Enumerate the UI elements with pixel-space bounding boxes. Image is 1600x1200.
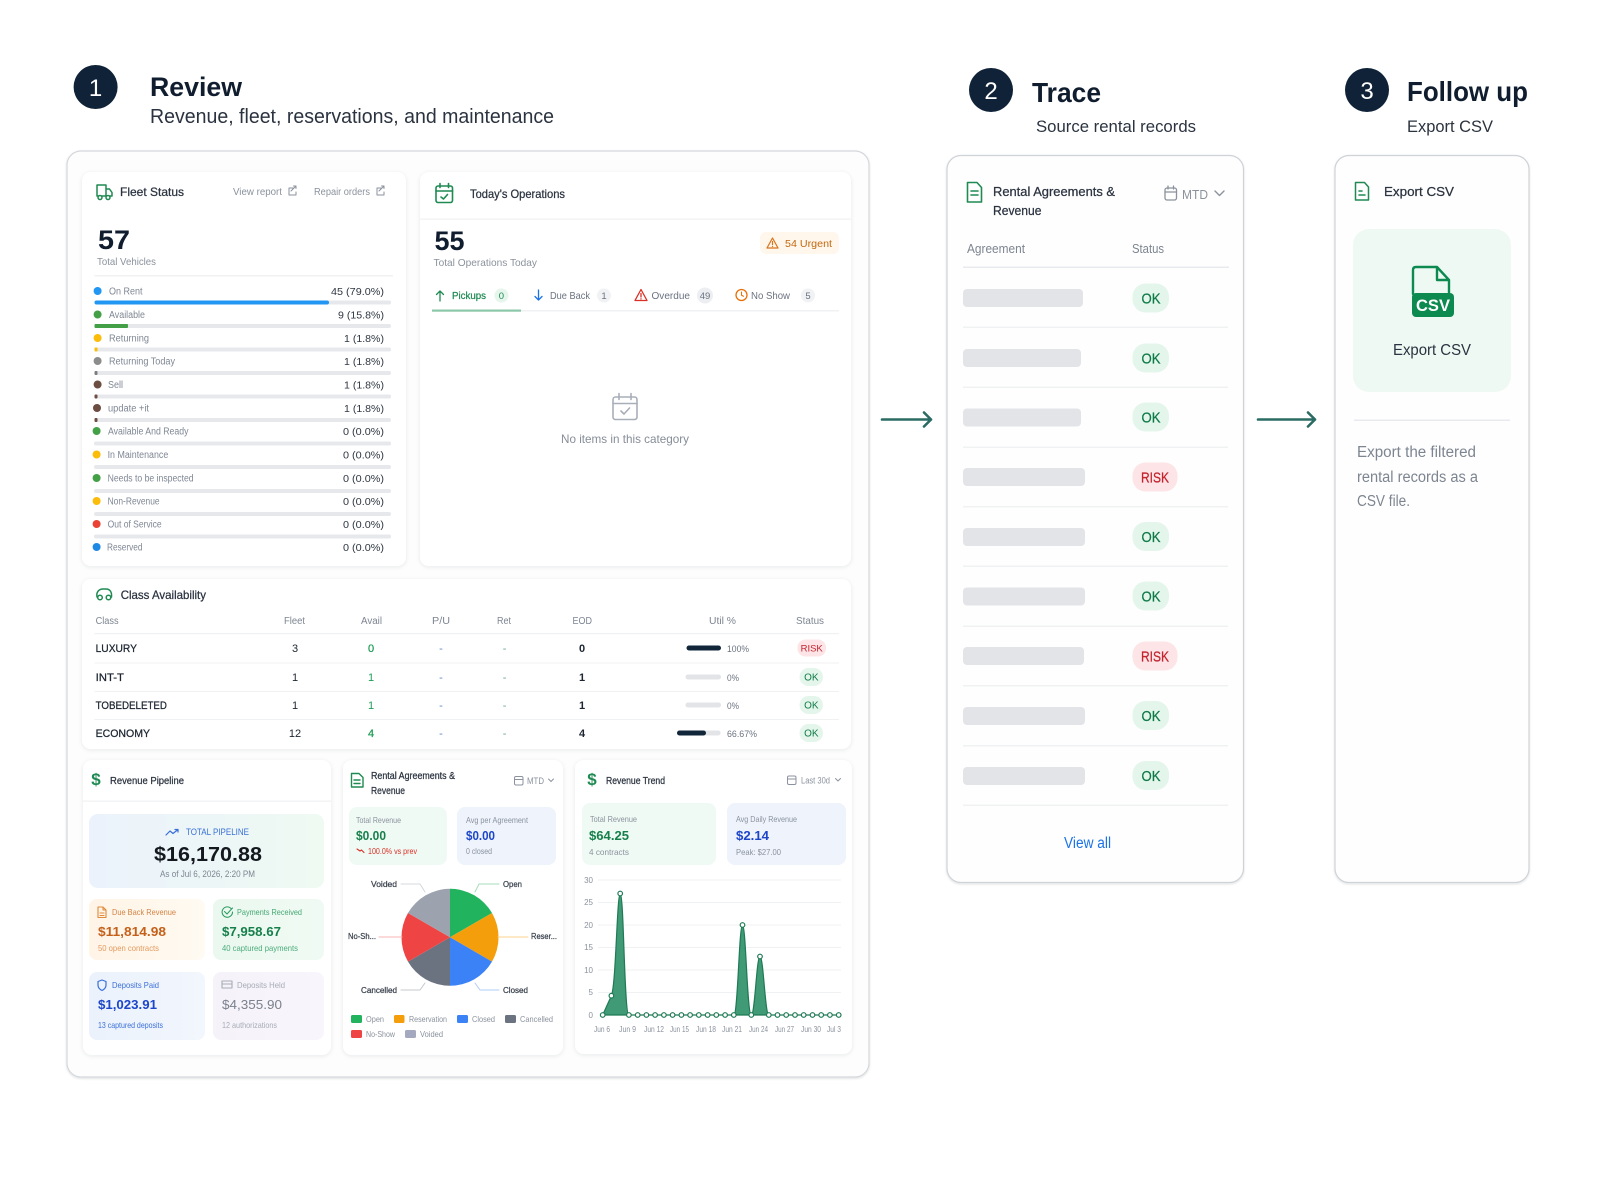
panel: rental agreements and revenue (small) [343,760,563,1055]
status row: Reserved [93,542,384,554]
table row: TOBEDELETED: - [439,700,443,712]
table row: INT-T: INT-T [96,672,124,684]
pie chart: Voided [371,879,397,889]
card: export csv action [1353,229,1511,392]
step 1 heading: Review [74,65,554,128]
status row: Returning: Returning [109,334,149,344]
control: MTD selector [514,776,554,787]
tab: no show [736,288,815,302]
table row: TOBEDELETED: OK [804,700,819,712]
card: average per agreement: 0 closed [466,846,492,856]
table row: ECONOMY: - [503,728,507,740]
pie chart: Closed [503,985,528,995]
table header: Ret [497,616,511,627]
area chart: revenue trend [584,876,841,1034]
table row: LUXURY: LUXURY [96,643,138,655]
tab: pickups [436,288,508,302]
table row: INT-T: - [503,672,507,684]
panel: today's operations: Today's Operations [470,187,565,201]
panel: export csv: Export CSV [1384,184,1454,199]
empty state [561,394,689,446]
card: total pipeline: As of Jul 6, 2026, 2:20 PM [160,869,255,879]
arrow: trace to follow up [1258,412,1315,426]
pie chart: Cancelled [361,985,397,995]
panel: fleet status: Repair orders [314,187,370,198]
area chart: revenue trend: Jun 12 [644,1025,664,1034]
tab: due back: Due Back [550,290,591,302]
status row: Returning Today [94,356,391,375]
status row: Returning Today: Returning Today [109,356,175,368]
area chart: revenue trend: 5 [589,988,594,997]
status row: Reserved: Reserved [107,542,142,554]
record row 9: OK [1142,768,1160,785]
card: payments received: $7,958.67 [222,924,281,939]
tab: overdue: Overdue [652,290,690,302]
text block: export description: CSV file. [1357,493,1410,510]
table row: LUXURY: 100% [727,644,749,654]
status row: Sell: Sell [108,380,123,391]
table header: EOD [572,616,592,627]
link: view all: View all [1064,835,1111,852]
table row: TOBEDELETED: 0% [727,701,739,711]
table header: Status [1132,242,1164,256]
record row 8: OK [1142,708,1160,725]
table row: TOBEDELETED: 1 [292,700,298,712]
table row: INT-T: OK [804,672,819,684]
panel: revenue pipeline [83,760,331,1055]
table row: INT-T: 0% [727,673,739,683]
icon: document [1356,182,1368,200]
icon: truck [97,185,112,200]
card: due back revenue: 50 open contracts [98,943,159,953]
record row 1: OK [1142,290,1160,308]
card: average per agreement [457,807,556,865]
tab: no show: No Show [751,290,790,302]
record row 5: OK [1142,529,1160,546]
record row 5 [963,522,1169,551]
card: deposits paid [89,972,205,1040]
step 2 heading: Trace: Source rental records [1036,117,1196,136]
status row: Non-Revenue: 0 (0.0%) [343,496,384,508]
status row: Non-Revenue: Non-Revenue [108,496,160,508]
card: total revenue: 100.0% vs prev [368,846,418,856]
panel: today's operations: Total Operations Today [434,257,538,269]
status row: Available [94,310,391,328]
card: average per agreement: Avg per Agreement [466,815,529,825]
panel: class availability [82,579,851,749]
icon: dollar: $ [587,770,597,789]
status row: Out of Service: Out of Service [108,520,162,530]
panel: rental agreements and revenue (small): Revenue [371,786,405,797]
status row: Reserved: 0 (0.0%) [343,542,384,554]
card: deposits paid: 13 captured deposits [98,1020,163,1030]
table row: TOBEDELETED: 1 [579,700,585,712]
card: total pipeline: TOTAL PIPELINE [186,827,249,837]
panel: today's operations [420,172,851,566]
icon: document [352,774,363,787]
panel: fleet status: Fleet Status [120,185,184,199]
table row: ECONOMY: 4 [368,728,374,740]
card: due back revenue: $11,814.98 [98,924,166,939]
status row: Returning [94,333,391,352]
chart legend: Voided [420,1029,443,1039]
table row: ECONOMY: 66.67% [727,729,757,739]
card: average daily revenue: Peak: $27.00 [736,847,781,857]
table row: ECONOMY: 12 [289,728,301,740]
pie chart [348,879,557,995]
icon: csv file: CSV [1416,296,1451,315]
table row: LUXURY [96,640,826,656]
table row: INT-T [96,668,823,686]
card: due back revenue: Due Back Revenue [112,907,176,917]
status row: update +it [93,403,391,422]
table row: INT-T: 1 [292,672,298,684]
status row: In Maintenance: In Maintenance [108,450,169,461]
table row: LUXURY: 3 [292,643,298,655]
panel: export csv [1335,156,1529,882]
status row: Available And Ready: Available And Ready [108,426,188,438]
panel: rental agreements trace: Rental Agreements & [993,184,1115,199]
status row: On Rent: 45 (79.0%) [331,286,384,298]
table row: LUXURY: 0 [579,643,585,655]
card: average daily revenue: $2.14 [736,828,770,843]
area chart: revenue trend: 30 [584,876,594,885]
table header: Agreement [967,242,1025,256]
icon: external link [377,186,384,195]
control: last 30 days selector: Last 30d [801,776,830,786]
badge: urgent [760,232,839,254]
area chart: revenue trend: 15 [584,943,594,952]
table header: Class [96,616,119,627]
icon: empty calendar [613,394,637,420]
tab: pickups: Pickups [452,290,486,302]
step 3 heading: Follow up [1345,68,1528,136]
record row 8 [963,701,1169,730]
tab: pickups: 0 [499,291,504,302]
area chart: revenue trend: Jul 3 [827,1025,841,1034]
table row: INT-T: - [439,672,443,684]
arrow: review to trace [882,412,931,426]
icon: csv file [1412,267,1454,317]
status row: Out of Service [93,519,391,538]
area chart: revenue trend: Jun 24 [749,1025,768,1034]
card: deposits held: $4,355.90 [222,997,282,1012]
record row 3: OK [1142,410,1160,426]
status row: Sell [94,380,391,398]
chart legend: No-Show [366,1029,396,1039]
tab: due back [535,288,611,302]
chart legend: Cancelled [520,1014,553,1024]
table row: TOBEDELETED: - [503,700,507,712]
chart legend [351,1014,553,1039]
table header: P/U [432,616,450,627]
icon: external link [289,186,296,195]
table row: TOBEDELETED [96,696,823,714]
table header: Avail [361,616,382,627]
status row: Needs to be inspected [93,473,391,493]
status row: In Maintenance: 0 (0.0%) [343,450,384,462]
area chart: revenue trend: 0 [589,1011,594,1020]
status row: Needs to be inspected: Needs to be inspected [108,474,194,484]
panel: revenue pipeline: Revenue Pipeline [110,775,184,787]
area chart: revenue trend: Jun 30 [801,1025,821,1034]
icon: document [968,182,982,202]
text block: export description: Export the filtered [1357,444,1476,461]
table row: TOBEDELETED: TOBEDELETED [96,700,167,712]
area chart: revenue trend: 20 [584,921,594,930]
area chart: revenue trend: Jun 9 [619,1025,636,1034]
status row: On Rent: On Rent [109,286,143,298]
chart legend: Reservation [409,1014,447,1024]
card: total revenue [582,803,716,865]
table row: TOBEDELETED: 1 [368,700,374,712]
panel: rental agreements trace [947,156,1244,882]
icon: calendar check [436,184,452,202]
card: total revenue: $64.25 [589,828,629,843]
card: payments received: Payments Received [237,907,302,917]
card: total revenue: Total Revenue [356,815,401,825]
record row 1 [963,284,1169,312]
status row: Out of Service: 0 (0.0%) [343,519,384,531]
icon: car [97,589,112,600]
card: deposits paid: $1,023.91 [98,997,157,1012]
table row: ECONOMY: 4 [579,728,586,740]
table row: LUXURY: RISK [801,644,823,654]
table header [967,242,1164,256]
panel: fleet status: 57 [98,225,130,255]
area chart: revenue trend: Jun 18 [696,1025,716,1034]
table row: LUXURY: - [439,643,443,655]
status row: update +it: 1 (1.8%) [344,403,384,415]
table row: ECONOMY: ECONOMY [96,728,151,740]
icon: dollar: $ [91,770,101,789]
status row: In Maintenance [93,450,391,469]
card: deposits held [213,972,324,1040]
step 2 heading: Trace: Trace [1032,77,1101,108]
record row 4: RISK [1141,470,1169,486]
card: deposits paid: Deposits Paid [112,980,159,990]
status row: update +it: update +it [108,404,149,414]
status row: Available: Available [109,310,145,321]
card: deposits held: Deposits Held [237,980,285,990]
status row: Sell: 1 (1.8%) [344,380,384,392]
empty state: No items in this category [561,432,689,446]
table header: Status [796,616,824,627]
step 3 heading: Follow up: Export CSV [1407,117,1494,136]
tab: overdue [635,288,713,304]
card: average daily revenue: Avg Daily Revenue [736,814,797,824]
pie chart: Reser... [531,931,557,941]
card: average daily revenue [727,803,846,865]
card: total revenue: $0.00 [356,828,386,843]
record row 9 [963,761,1169,790]
step 1 heading: Review: Revenue, fleet, reservations, and maintenance [150,106,554,128]
panel: rental agreements and revenue (small): Rental Agreements & [371,771,455,782]
panel: revenue trend [575,760,852,1054]
record row 2: OK [1142,350,1160,368]
tab: overdue: 49 [700,291,710,302]
step 1 heading: Review: 1 [89,75,102,102]
table header: Fleet [284,616,305,627]
control: MTD selector: MTD [527,776,544,787]
card: payments received [213,899,324,960]
card: total revenue: Total Revenue [590,814,637,824]
table row: ECONOMY: - [439,728,443,740]
pie chart: Open [503,879,522,889]
control: last 30 days selector [788,776,840,786]
pie chart: No-Sh... [348,931,376,941]
panel: fleet status: Total Vehicles [97,256,156,268]
record row 3 [963,402,1169,432]
status row: Needs to be inspected: 0 (0.0%) [343,473,384,485]
record row 7: RISK [1141,648,1169,666]
panel: class availability: Class Availability [121,588,206,602]
tab: no show: 5 [805,291,811,302]
card: total pipeline: $16,170.88 [154,844,262,866]
table row: ECONOMY: OK [804,728,819,740]
status row: Returning Today: 1 (1.8%) [344,356,384,368]
table row: LUXURY: - [503,643,507,655]
status row: Available And Ready: 0 (0.0%) [343,426,384,438]
area chart: revenue trend: Jun 15 [670,1025,689,1034]
step 3 heading: Follow up: Follow up [1407,76,1528,107]
card: total revenue [349,807,447,865]
card: deposits held: 12 authorizations [222,1020,277,1030]
control: MTD selector [1165,186,1224,202]
area chart: revenue trend: 10 [584,966,594,975]
area chart: revenue trend: Jun 27 [775,1025,794,1034]
step 3 heading: Follow up: 3 [1360,78,1374,105]
card: average per agreement: $0.00 [466,828,495,843]
status row: Non-Revenue [93,496,391,516]
area chart: revenue trend: Jun 6 [594,1025,610,1034]
chart legend: Open [366,1014,384,1024]
card: due back revenue [89,899,205,960]
panel: fleet status [82,172,406,566]
text block: export description: rental records as a [1357,469,1478,486]
table row: ECONOMY [96,724,823,742]
table row: INT-T: 1 [368,672,374,684]
record row 2 [963,344,1169,372]
text block: export description [1357,444,1478,510]
step 2 heading: Trace: 2 [984,78,998,105]
record row 7 [963,642,1178,670]
panel: today's operations: 55 [434,226,464,256]
table row: INT-T: 1 [579,672,585,684]
step 1 heading: Review: Review [150,72,243,102]
control: MTD selector: MTD [1182,188,1208,202]
area chart: revenue trend: Jun 21 [722,1025,742,1034]
status row: Available And Ready [93,426,391,446]
record row 6: OK [1142,588,1160,606]
tab: due back: 1 [601,291,607,302]
status row: Available: 9 (15.8%) [338,310,384,322]
card: total revenue: 4 contracts [589,847,629,857]
chart legend: Closed [472,1014,495,1024]
record row 6 [963,582,1169,610]
panel: fleet status: View report [233,187,282,198]
card: payments received: 40 captured payments [222,943,298,953]
card: total pipeline [89,814,324,888]
table header: Util % [709,616,736,627]
table header [96,616,824,627]
card: export csv action: Export CSV [1393,342,1472,359]
status row: On Rent [94,286,391,304]
record row 4 [963,462,1178,492]
panel: rental agreements trace: Revenue [993,203,1042,218]
status row: Returning: 1 (1.8%) [344,333,384,345]
step 2 heading: Trace [969,68,1196,136]
panel: review dashboard [67,151,869,1077]
area chart: revenue trend: 25 [584,898,594,907]
badge: urgent: 54 Urgent [785,238,832,250]
table row: LUXURY: 0 [368,643,374,655]
panel: revenue trend: Revenue Trend [606,776,665,787]
